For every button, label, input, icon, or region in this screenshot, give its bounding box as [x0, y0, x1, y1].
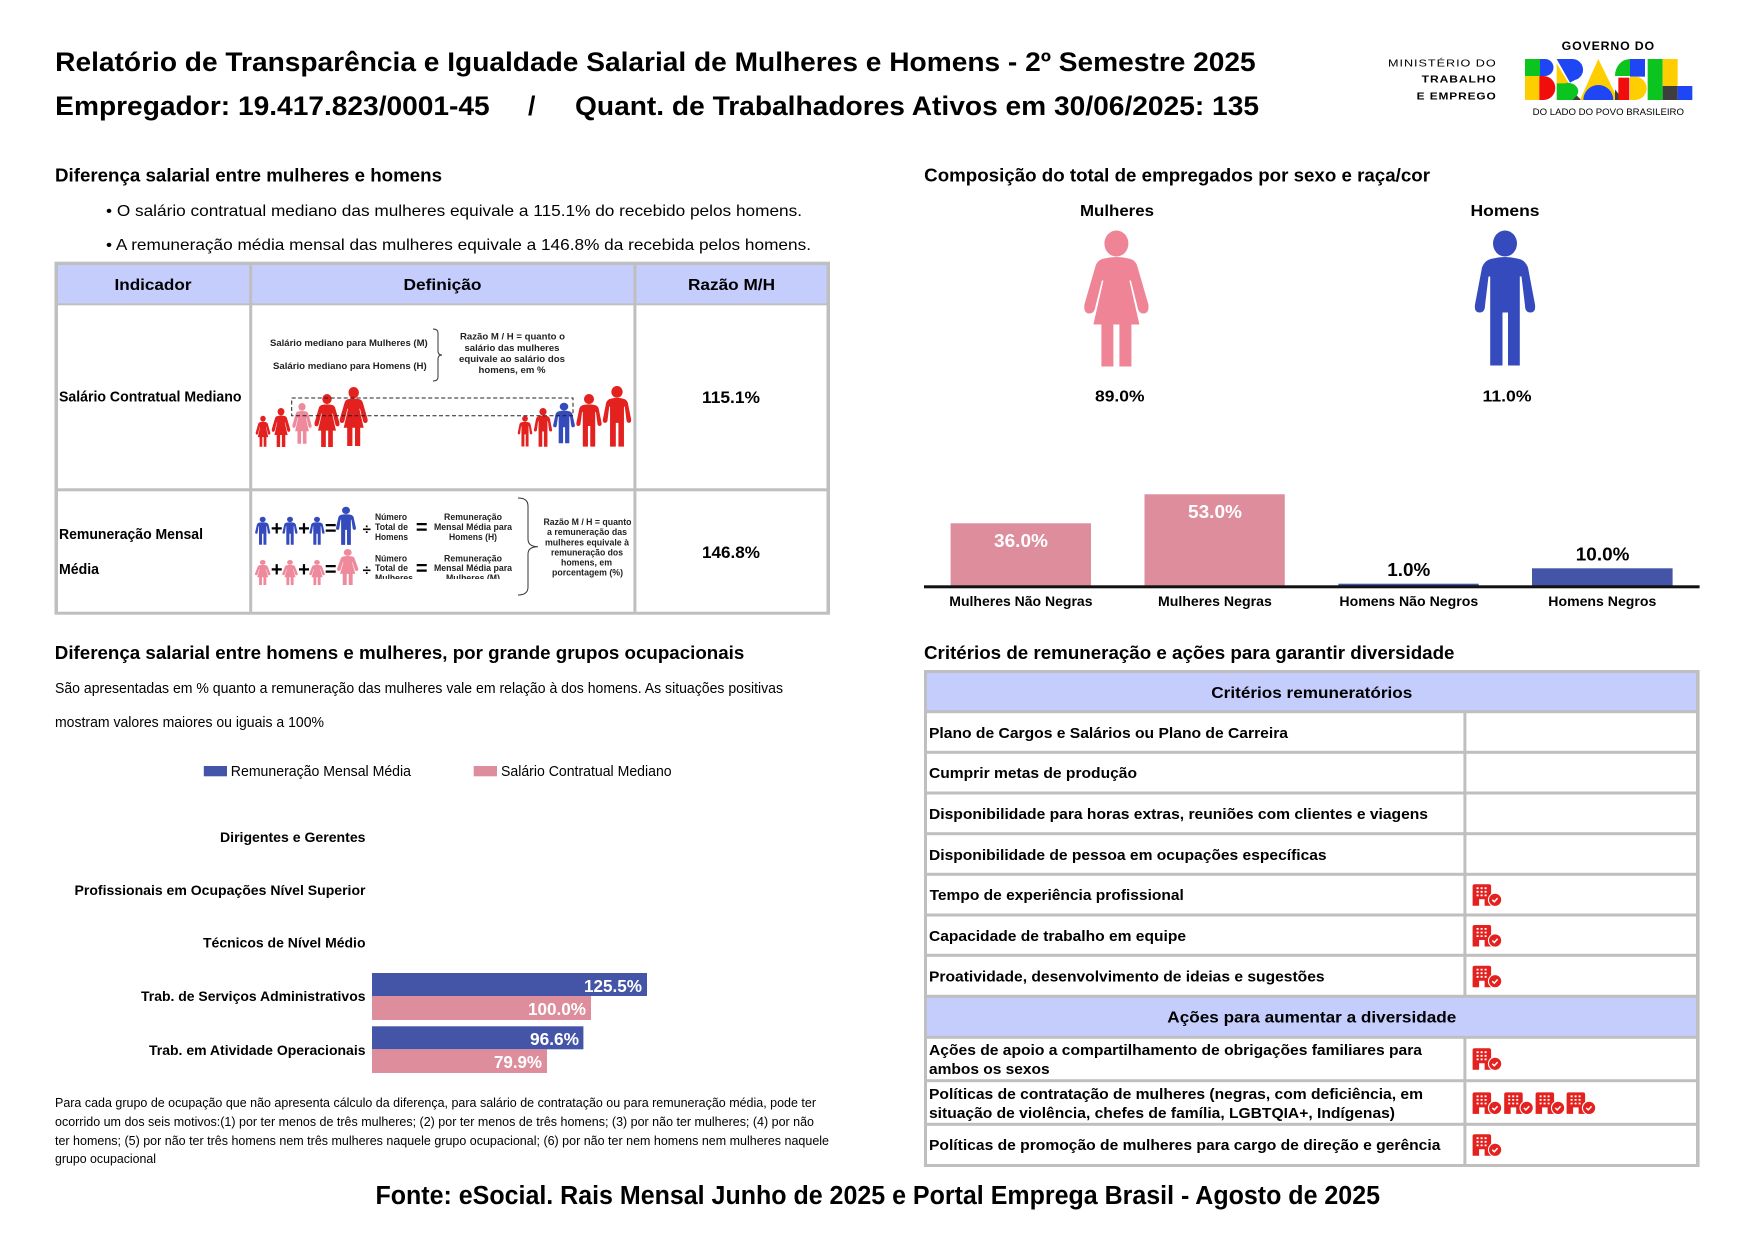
bar chart: grupos ocupacionais: 100.0% — [528, 999, 586, 1019]
diagram: salário mediano: Salário mediano para Mulheres (M) — [270, 337, 428, 348]
table: indicadores: 146.8% — [702, 544, 760, 562]
bar chart: grupos ocupacionais: 125.5% — [584, 976, 642, 996]
bar chart: composição: 10.0% — [1576, 545, 1629, 565]
text block: nota de rodapé: grupo ocupacional — [55, 1151, 156, 1166]
diagram: remuneração média: + — [271, 518, 283, 540]
icon: políticas de promoção — [1473, 1134, 1502, 1157]
diagram: remuneração média: Remuneração — [444, 553, 502, 564]
diagram: remuneração média: + — [271, 559, 283, 581]
logo: ministério: E EMPREGO — [1417, 90, 1497, 102]
logo: governo do brasil — [1525, 39, 1692, 117]
bar chart: composição: Homens Não Negros — [1339, 593, 1478, 609]
logo: governo do brasil: DO LADO DO POVO BRASILEIRO — [1533, 107, 1684, 117]
diagram: remuneração média: porcentagem (%) — [552, 567, 623, 578]
icon: capacidade de trabalho — [1473, 925, 1502, 948]
table: critérios e ações: Ações para aumentar a diversidade — [1167, 1010, 1456, 1027]
bar chart: grupos ocupacionais: Trab. em Atividade Operacionais — [149, 1042, 366, 1058]
table: critérios e ações: Plano de Cargos e Salários ou Plano de Carreira — [929, 726, 1289, 742]
label: mulheres: Mulheres — [1080, 203, 1154, 220]
bar chart: composição: Mulheres Não Negras — [949, 593, 1093, 609]
table: critérios e ações: Tempo de experiência profissional — [930, 888, 1184, 904]
table: indicadores: Média — [59, 562, 100, 578]
bar chart: grupos ocupacionais: Técnicos de Nível Médio — [203, 934, 366, 950]
diagram: remuneração média: Total de — [375, 562, 408, 573]
icon: proatividade — [1473, 966, 1502, 988]
diagram: remuneração média: = — [325, 559, 337, 581]
diagram: remuneração média: Total de — [375, 521, 408, 532]
value: homens 11.0%: 11.0% — [1482, 389, 1532, 406]
diagram: remuneração média: mulheres equivale à — [545, 537, 630, 548]
table: indicadores: Indicador — [114, 277, 192, 294]
table: critérios e ações: Cumprir metas de produção — [929, 766, 1137, 782]
heading: grupos ocupacionais: Diferença salarial entre homens e mulheres, por grande grupos ocupacionais — [55, 643, 744, 663]
bar chart: grupos ocupacionais: 79.9% — [494, 1052, 542, 1072]
table: indicadores: Remuneração Mensal — [59, 527, 203, 543]
icon: homem — [1475, 230, 1535, 366]
diagram: remuneração média: Remuneração — [444, 511, 502, 522]
title: Empregador: 19.417.823/0001-45 — [55, 91, 490, 121]
table: indicadores: Definição — [404, 277, 482, 294]
icon: apoio a obrigações familiares — [1473, 1048, 1502, 1071]
diagram: remuneração média: remuneração dos — [551, 547, 623, 558]
table: critérios e ações: Disponibilidade de pessoa em ocupações específicas — [929, 848, 1327, 864]
logo: governo do brasil: GOVERNO DO — [1562, 39, 1655, 53]
icon: tempo de experiência — [1473, 884, 1502, 907]
diagram: remuneração média: homens, em — [561, 557, 612, 568]
value: mulheres 89.0%: 89.0% — [1095, 389, 1144, 406]
heading: critérios: Critérios de remuneração e ações para garantir diversidade — [924, 643, 1454, 663]
fonte: Fonte: eSocial. Rais Mensal Junho de 2025 e Portal Emprega Brasil - Agosto de 2025 — [376, 1182, 1380, 1210]
table: critérios e ações — [924, 670, 1700, 1167]
title: / — [528, 91, 536, 121]
heading: diferença salarial: Diferença salarial entre mulheres e homens — [55, 166, 442, 186]
title — [55, 47, 1259, 121]
text block: nota de rodapé: ter homens; (5) por não ter três homens nem três mulheres naquele grupo ocupacional; (6) por não ter nem homens nem mulheres naquele — [55, 1133, 829, 1148]
diagram: remuneração média: = — [416, 558, 428, 580]
bullet: salário contratual: • O salário contratual mediano das mulheres equivale a 115.1% do recebido pelos homens. — [106, 203, 802, 220]
panel: composição — [924, 166, 1700, 609]
diagram: remuneração média: Número — [375, 511, 407, 522]
table: critérios e ações: Políticas de contratação de mulheres (negras, com deficiência, em — [929, 1087, 1423, 1103]
diagram: remuneração média — [255, 498, 632, 595]
diagram: salário mediano: equivale ao salário dos — [459, 353, 565, 364]
diagram: remuneração média: Mensal Média para — [434, 521, 513, 532]
table: indicadores: Razão M/H — [688, 277, 775, 294]
diagram: salário mediano: Razão M / H = quanto o — [460, 330, 565, 342]
bar chart: grupos ocupacionais: 96.6% — [530, 1029, 579, 1049]
table: critérios e ações: ambos os sexos — [929, 1062, 1050, 1078]
diagram: remuneração média: Número — [375, 553, 407, 564]
table: indicadores: Salário Contratual Mediano — [59, 390, 242, 406]
table: critérios e ações: Disponibilidade para horas extras, reuniões com clientes e viagens — [929, 807, 1428, 823]
diagram: remuneração média: Razão M / H = quanto — [544, 516, 632, 527]
bar chart: composição: Mulheres Negras — [1158, 593, 1272, 609]
diagram: remuneração média: a remuneração das — [547, 526, 627, 537]
bullet: remuneração média: • A remuneração média mensal das mulheres equivale a 146.8% da recebida pelos homens. — [106, 237, 811, 254]
diagram: remuneração média: ÷ — [363, 521, 371, 538]
logo: ministério: TRABALHO — [1422, 74, 1497, 86]
table: critérios e ações: situação de violência, chefes de família, LGBTQIA+, Indígenas) — [929, 1106, 1395, 1122]
diagram: salário mediano: salário das mulheres — [464, 342, 560, 353]
bar chart: composição: 36.0% — [994, 531, 1048, 551]
legend: Remuneração Mensal Média — [231, 764, 412, 780]
label: homens: Homens — [1470, 203, 1540, 220]
diagram: salário mediano — [256, 329, 631, 447]
text block: explicação: São apresentadas em % quanto a remuneração das mulheres vale em relação à dos homens. As situações positivas — [55, 681, 783, 697]
diagram: salário mediano: homens, em % — [478, 364, 546, 375]
heading: composição: Composição do total de empregados por sexo e raça/cor — [924, 166, 1430, 186]
logo: ministério: MINISTÉRIO DO — [1388, 57, 1497, 70]
table: critérios e ações: Políticas de promoção de mulheres para cargo de direção e gerência — [929, 1138, 1441, 1154]
bar chart: composição — [924, 494, 1700, 609]
table: critérios e ações: Critérios remuneratórios — [1211, 685, 1412, 702]
table: critérios e ações: Proatividade, desenvolvimento de ideias e sugestões — [929, 970, 1325, 986]
diagram: remuneração média: Homens (H) — [449, 531, 497, 542]
table: critérios e ações: Ações de apoio a compartilhamento de obrigações familiares para — [929, 1043, 1423, 1059]
diagram: remuneração média: = — [416, 517, 428, 539]
table: indicadores: 115.1% — [702, 389, 760, 407]
panel: grupos ocupacionais — [55, 643, 829, 1166]
diagram: remuneração média: Mensal Média para — [434, 562, 513, 573]
legend — [204, 764, 672, 780]
title: Relatório de Transparência e Igualdade Salarial de Mulheres e Homens - 2º Semestre 2025 — [55, 47, 1256, 77]
text block: explicação — [55, 681, 783, 731]
bar chart: composição: 1.0% — [1387, 560, 1430, 580]
diagram: remuneração média: Mulheres (M) — [446, 572, 500, 583]
bar chart: grupos ocupacionais: Profissionais em Ocupações Nível Superior — [74, 882, 366, 898]
diagram: salário mediano: Salário mediano para Homens (H) — [273, 360, 427, 371]
icon: mulher — [1084, 230, 1149, 366]
icons: políticas de contratação — [1473, 1092, 1596, 1115]
table: indicadores — [54, 262, 830, 615]
title: Quant. de Trabalhadores Ativos em 30/06/2025: 135 — [575, 91, 1259, 121]
panel: diferença salarial — [54, 166, 830, 615]
bar chart: composição: 53.0% — [1188, 502, 1242, 522]
text block: nota de rodapé: Para cada grupo de ocupação que não apresenta cálculo da diferença, para salário de contratação ou para remuneração média, pode ter — [55, 1095, 817, 1110]
text block: explicação: mostram valores maiores ou iguais a 100% — [55, 715, 324, 731]
legend: Salário Contratual Mediano — [501, 764, 672, 780]
diagram: remuneração média: + — [298, 518, 310, 540]
text block: nota de rodapé — [55, 1095, 829, 1166]
bar chart: grupos ocupacionais: Trab. de Serviços Administrativos — [141, 988, 366, 1004]
logo: ministério — [1388, 57, 1497, 102]
diagram: remuneração média: = — [325, 518, 337, 540]
bar chart: composição: Homens Negros — [1548, 593, 1657, 609]
panel: critérios — [924, 643, 1700, 1167]
diagram: remuneração média: + — [298, 559, 310, 581]
diagram: remuneração média: ÷ — [363, 562, 371, 579]
diagram: remuneração média: Homens — [375, 531, 408, 542]
bar chart: grupos ocupacionais: Dirigentes e Gerentes — [220, 829, 366, 845]
diagram: remuneração média: Mulheres — [375, 572, 413, 583]
text block: nota de rodapé: ocorrido um dos seis motivos:(1) por ter menos de três mulheres; (2) por ter menos de três homens; (3) por não ter mulheres; (4) por não — [55, 1114, 814, 1129]
bar chart: grupos ocupacionais — [74, 829, 647, 1073]
table: critérios e ações: Capacidade de trabalho em equipe — [929, 929, 1186, 945]
